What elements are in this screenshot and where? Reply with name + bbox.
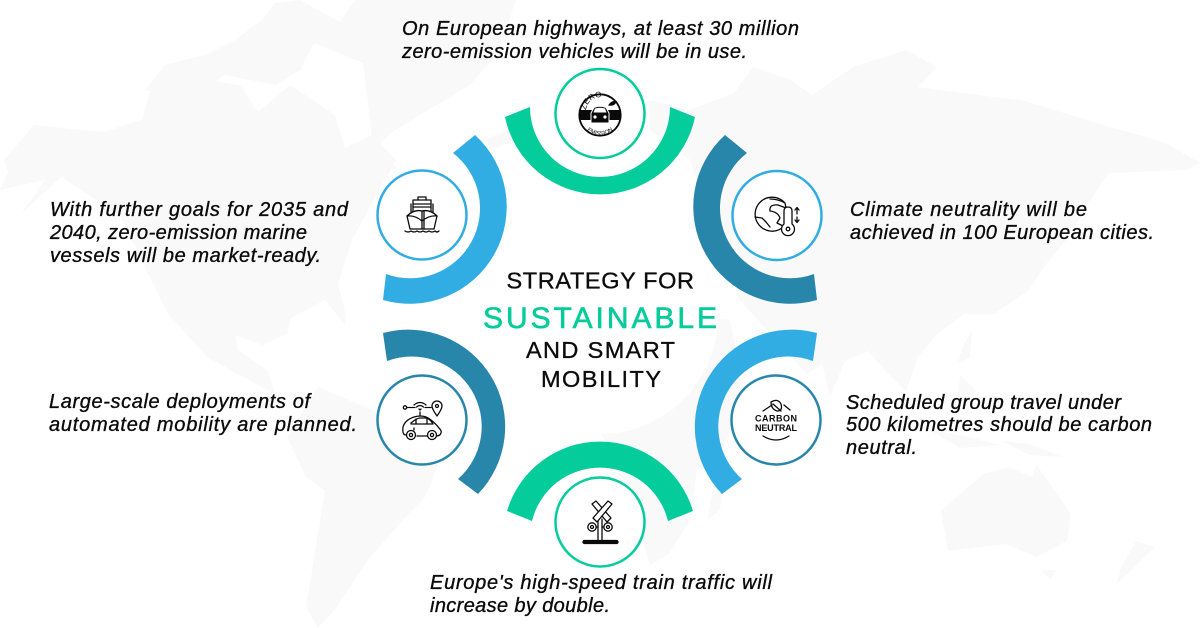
text: carbon neutral group travel: Scheduled group travel under	[846, 392, 1122, 414]
text: marine vessels: 2040, zero-emission marine	[49, 222, 307, 244]
text: carbon neutral group travel	[846, 392, 1152, 459]
arc: lower left dark blue	[383, 330, 505, 494]
title: SUSTAINABLE	[483, 302, 717, 335]
icon: railroad crossing	[556, 478, 644, 566]
arc: upper left light blue	[383, 135, 507, 304]
icon: zero emission badge	[554, 68, 646, 160]
text: high-speed trains	[430, 572, 773, 617]
text: marine vessels: With further goals for 2035 and	[50, 199, 349, 221]
text: climate neutrality: Climate neutrality will be	[850, 199, 1087, 221]
text: high-speed trains: increase by double.	[430, 595, 610, 617]
title: AND SMART	[526, 337, 675, 363]
icon: globe with thermometer	[732, 171, 822, 260]
text: carbon neutral group travel: neutral.	[846, 437, 917, 459]
title: STRATEGY FOR	[506, 268, 694, 294]
arc: upper right dark blue	[693, 135, 817, 304]
text: marine vessels: vessels will be market-ready.	[50, 245, 321, 267]
arc: lower right light blue	[695, 330, 817, 494]
text: zero-emission vehicles: zero-emission vehicles will be in use.	[401, 41, 747, 63]
text: automated mobility	[49, 391, 357, 436]
title: MOBILITY	[541, 366, 661, 392]
text: automated mobility: Large-scale deployments of	[49, 391, 312, 413]
text: high-speed trains: Europe's high-speed train traffic will	[430, 572, 773, 594]
icon: cargo ship	[378, 170, 466, 260]
arc: top green	[505, 107, 695, 194]
text: marine vessels	[49, 199, 349, 267]
icon: autonomous car	[378, 376, 466, 464]
arc: bottom green	[507, 442, 693, 521]
text: climate neutrality	[850, 199, 1154, 244]
icon: zero emission badge: ZERO	[581, 92, 601, 110]
icon: carbon neutral badge: CARBON	[755, 414, 797, 424]
icon: carbon neutral badge: NEUTRAL	[755, 423, 798, 433]
title	[483, 268, 717, 392]
text: automated mobility: automated mobility are planned.	[49, 414, 357, 436]
text: zero-emission vehicles: On European highways, at least 30 million	[402, 18, 799, 40]
center white area	[482, 198, 718, 434]
icon: zero emission badge: EMISSION	[588, 127, 612, 135]
text: carbon neutral group travel: 500 kilometres should be carbon	[846, 414, 1152, 436]
text: climate neutrality: achieved in 100 European cities.	[850, 222, 1154, 244]
icon: carbon neutral badge	[732, 376, 820, 464]
text: zero-emission vehicles	[401, 18, 799, 63]
